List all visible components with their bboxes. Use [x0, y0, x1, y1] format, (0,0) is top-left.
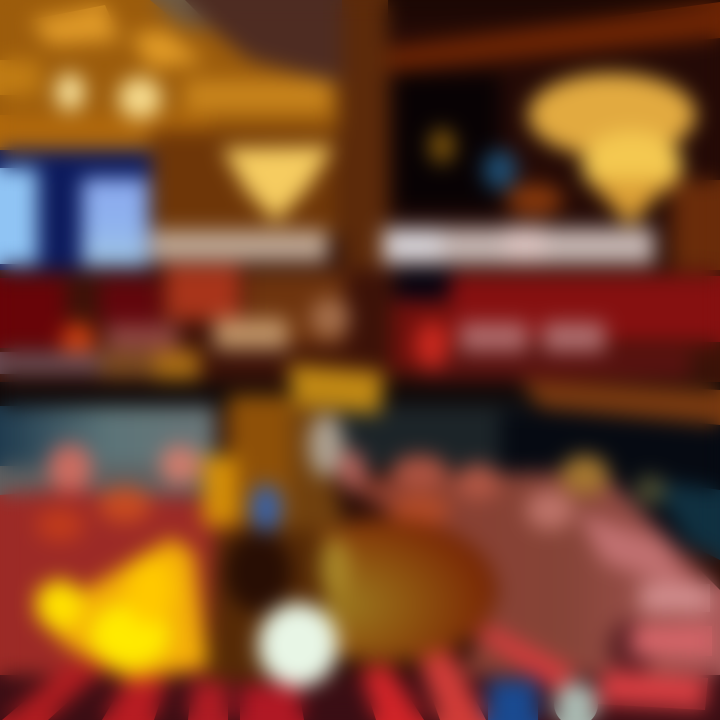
panel: wheel number segments	[36, 444, 712, 710]
panel: red seating	[0, 266, 720, 390]
icon: white ball	[258, 603, 338, 687]
icon: centre chandelier	[222, 146, 334, 222]
panel: bottom wheel stripes	[2, 646, 598, 720]
panel: central pillar	[342, 0, 388, 310]
panel: wall under ceiling	[150, 130, 340, 235]
icon: pale reflection on stem	[308, 413, 366, 490]
panel: wheel body	[0, 470, 720, 720]
panel: golden ceiling	[0, 0, 345, 150]
text block: blurred table highlights	[106, 298, 605, 380]
icon: blue knob	[250, 484, 282, 532]
icon: yellow reflection	[36, 538, 208, 680]
panel: screen backing	[0, 150, 152, 270]
panel: white signs	[150, 226, 654, 264]
icon: ceiling lights	[55, 73, 162, 119]
icon: right chandelier	[528, 73, 696, 226]
panel: dark wheel centre	[224, 532, 292, 612]
panel: upper room	[0, 0, 720, 310]
icon: golden turret stem	[203, 364, 384, 598]
icon: back wall details	[429, 128, 563, 216]
panel: turret base	[205, 520, 330, 680]
panel: floor band	[0, 380, 720, 560]
chart: roulette wheel	[0, 364, 720, 720]
icon: blue screens	[0, 168, 148, 266]
panel: dark upper right wall	[385, 0, 720, 300]
panel: bronze bowl	[273, 518, 497, 662]
